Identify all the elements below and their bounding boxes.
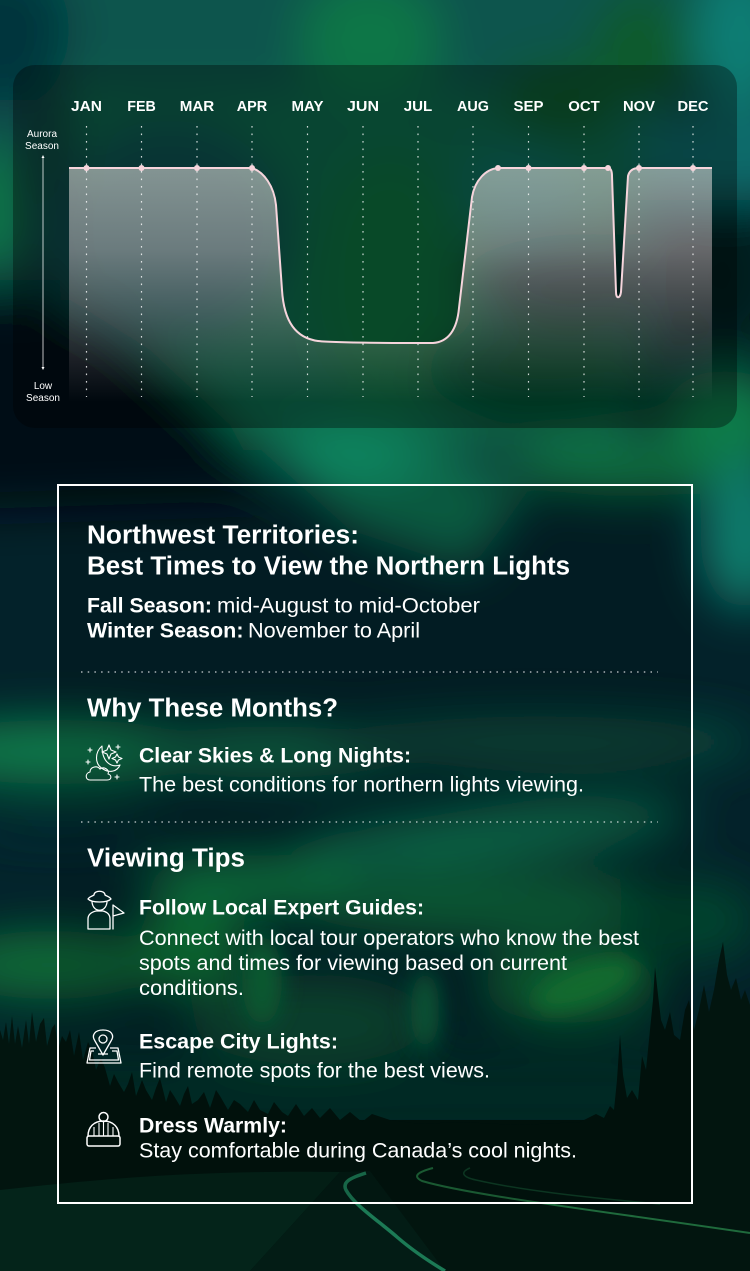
follow local expert guides text: Connect with local tour operators who know the best [139,927,639,950]
y-axis labels and arrow: Low [34,381,53,392]
month labels: APR [237,99,268,115]
seasons text: mid-August to mid-October [217,594,480,618]
area under curve [69,168,712,402]
follow local expert guides text: conditions. [139,977,244,1000]
month labels: OCT [568,99,600,115]
month labels: NOV [623,99,655,115]
y-axis labels and arrow: Season [25,141,59,152]
month labels: FEB [127,99,156,115]
escape city lights text: Find remote spots for the best views. [139,1060,490,1082]
clear skies text: The best conditions for northern lights viewing. [139,774,584,796]
seasons text [87,594,480,642]
dress warmly text [139,1114,577,1162]
icon: guide with flag [88,891,124,929]
heading: why these months: Why These Months? [87,694,338,722]
month labels: MAR [180,99,215,115]
seasons text: Winter Season: [87,620,244,642]
escape city lights text: Escape City Lights: [139,1030,338,1054]
dress warmly text: Dress Warmly: [139,1114,287,1138]
month labels [71,99,709,115]
month labels: AUG [457,99,489,115]
treeline silhouettes [0,942,750,1130]
month labels: JUN [347,99,379,115]
card background [13,65,737,428]
clear skies text [139,744,584,796]
y-axis labels and arrow [25,129,60,404]
y-axis labels and arrow: Aurora [27,129,57,140]
icon: moon, stars and cloud [86,745,122,780]
month labels: MAY [292,99,324,115]
follow local expert guides text: spots and times for viewing based on current [139,952,567,975]
heading: northwest territories: Northwest Territories: [87,522,359,550]
aurora curve [69,168,712,343]
clear skies text: Clear Skies & Long Nights: [139,744,411,768]
panel frame [58,485,692,1203]
month labels: SEP [514,99,544,115]
icon: map pin [87,1030,121,1063]
heading: northwest territories: Best Times to View the Northern Lights [87,552,570,580]
month labels: JUL [404,99,432,115]
follow local expert guides text [139,896,639,1000]
y-axis labels and arrow: Season [26,393,60,404]
icon: winter hat [87,1112,120,1146]
seasons text: November to April [248,620,420,642]
month labels: JAN [71,99,102,115]
heading: viewing tips: Viewing Tips [87,844,245,872]
heading: northwest territories [87,522,570,580]
seasons text: Fall Season: [87,594,212,618]
escape city lights text [139,1030,490,1082]
month labels: DEC [678,99,709,115]
curve markers [84,165,696,171]
dress warmly text: Stay comfortable during Canada’s cool nights. [139,1140,577,1162]
ground [0,1120,750,1271]
month gridlines [86,126,693,397]
follow local expert guides text: Follow Local Expert Guides: [139,896,424,920]
